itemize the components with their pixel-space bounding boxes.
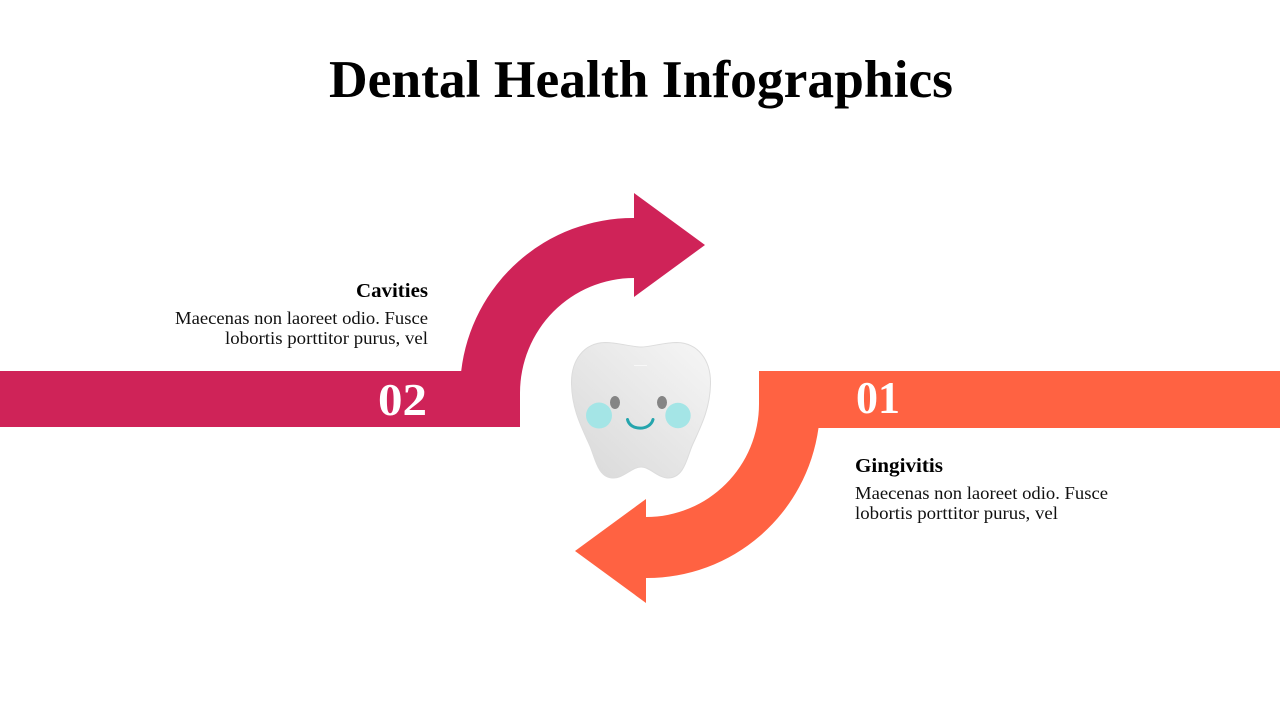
heading: Gingivitis: Gingivitis (855, 455, 943, 477)
number 02: 02 (378, 375, 427, 425)
description: Gingivitis: lobortis porttitor purus, vel (855, 503, 1058, 523)
right eye (657, 396, 667, 409)
description: Cavities: lobortis porttitor purus, vel (225, 328, 428, 348)
tooth highlight (634, 365, 647, 366)
arrow: 01 orange curved arrow (575, 371, 1280, 603)
title: Dental Health Infographics (329, 51, 953, 109)
arrow: 02 red curved arrow (0, 193, 705, 427)
text block: Cavities (175, 280, 428, 348)
icon: smiling tooth (571, 342, 711, 478)
left cheek (586, 402, 612, 428)
description: Gingivitis (855, 483, 1108, 523)
text block: Gingivitis (855, 455, 1108, 523)
description: Gingivitis: Maecenas non laoreet odio. Fusce (855, 483, 1108, 503)
heading: Cavities: Cavities (356, 280, 428, 302)
description: Cavities: Maecenas non laoreet odio. Fusce (175, 308, 428, 328)
description: Cavities (175, 308, 428, 348)
number 01: 01 (856, 373, 900, 423)
left eye (610, 396, 620, 409)
smile (628, 420, 653, 428)
right cheek (665, 403, 691, 428)
tooth body (571, 342, 711, 478)
